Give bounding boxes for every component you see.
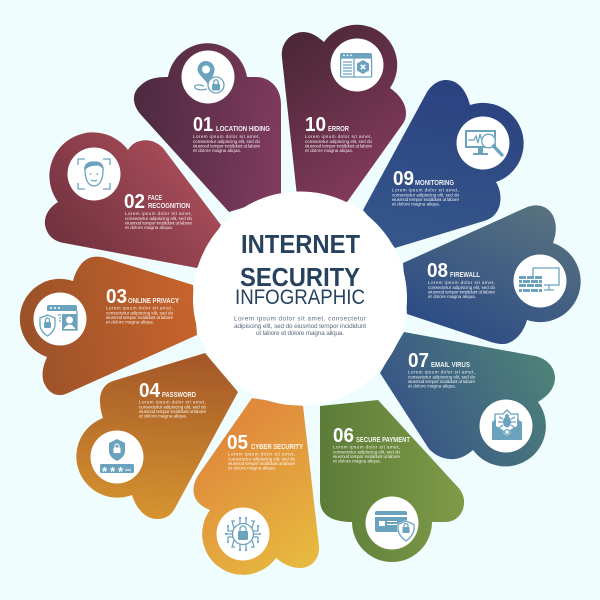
body text 10: Lorem ipsum dolor sit amet, — [305, 134, 372, 139]
petal shape 03 — [20, 257, 197, 395]
body text 04: Lorem ipsum dolor sit amet, — [139, 400, 206, 404]
title — [235, 231, 365, 309]
center description: Lorem ipsum dolor sit amet, consectetur — [234, 316, 367, 322]
title: INFOGRAPHIC — [235, 286, 365, 309]
number and label 10: ERROR — [328, 126, 349, 133]
icon: browser window with error — [330, 38, 384, 92]
panel: 04 password — [76, 353, 238, 519]
number and label 07 — [408, 350, 470, 372]
body text 01 — [193, 134, 260, 153]
panel: 03 online privacy — [20, 257, 197, 395]
number and label 06: 06 — [333, 425, 354, 447]
icon: envelope with bug — [480, 400, 532, 452]
number and label 05: 05 — [227, 432, 248, 454]
number and label 09: MONITORING — [415, 180, 454, 187]
body text 06: et dolore magna aliqua. — [333, 459, 381, 464]
body text 02: consectetur adipiscing elit, sed do — [125, 216, 192, 221]
body text 03: eiusmod tempor incididunt ut labore — [106, 315, 173, 320]
panel: 06 secure payment — [320, 400, 464, 562]
body text 02 — [125, 211, 192, 230]
body text 01: et dolore magna aliqua. — [193, 148, 241, 153]
body text 08: Lorem ipsum dolor sit amet, — [428, 280, 495, 285]
body text 04: et dolore magna aliqua. — [139, 414, 187, 419]
icon: browser with shield and user — [34, 292, 86, 346]
title: INTERNET — [241, 231, 360, 259]
petal shape 05 — [193, 398, 319, 575]
number and label 05: CYBER SECURITY — [251, 444, 303, 451]
number and label 10: 10 — [305, 114, 326, 136]
icon: credit card with shield — [366, 496, 418, 550]
panel: 10 error — [282, 25, 406, 202]
panel: 07 email virus — [380, 332, 555, 466]
petal shape 02 — [45, 132, 221, 268]
body text 10 — [305, 134, 372, 153]
body text 10: et dolore magna aliqua. — [305, 148, 353, 153]
number and label 04: 04 — [139, 380, 161, 402]
number and label 03 — [106, 286, 179, 308]
petal shape 07 — [380, 332, 555, 466]
petal shape 01 — [134, 43, 281, 212]
body text 02: eiusmod tempor incididunt ut labore — [125, 220, 192, 226]
body text 06: eiusmod tempor incididunt ut labore — [333, 454, 400, 459]
panel: 05 cyber security — [193, 398, 319, 575]
body text 03 — [106, 306, 173, 325]
center description: ut labore et dolore magna aliqua. — [256, 330, 344, 337]
panel: 08 firewall — [403, 205, 581, 344]
icon: location pin with lock — [182, 50, 234, 104]
center description: adipiscing elit, sed do eiusmod tempor incididunt — [234, 323, 366, 330]
body text 07 — [408, 370, 475, 389]
number and label 05 — [227, 432, 303, 454]
body text 07: eiusmod tempor incididunt ut labore — [408, 379, 475, 384]
body text 02: Lorem ipsum dolor sit amet, — [125, 211, 192, 216]
number and label 07: EMAIL VIRUS — [431, 362, 470, 369]
body text 06: consectetur adipiscing elit, sed do — [333, 449, 400, 454]
body text 09: et dolore magna aliqua. — [392, 202, 440, 207]
body text 04: consectetur adipiscing elit, sed do — [139, 404, 206, 409]
body text 09 — [392, 188, 459, 207]
title: SECURITY — [240, 264, 360, 292]
number and label 08: FIREWALL — [450, 272, 481, 279]
number and label 04 — [139, 380, 196, 402]
number and label 07: 07 — [408, 350, 429, 372]
number and label 03: ONLINE PRIVACY — [128, 298, 179, 305]
body text 05: et dolore magna aliqua. — [228, 466, 276, 471]
number and label 02: 02 — [124, 191, 145, 213]
body text 07: et dolore magna aliqua. — [408, 384, 456, 389]
petal shape 06 — [320, 400, 464, 562]
body text 03: et dolore magna aliqua. — [106, 320, 154, 325]
body text 09: consectetur adipiscing elit, sed do — [392, 192, 459, 197]
body text 03: Lorem ipsum dolor sit amet, — [106, 306, 173, 310]
center circle — [193, 192, 407, 406]
body text 05 — [228, 452, 295, 471]
number and label 08 — [427, 260, 481, 282]
number and label 06 — [333, 425, 411, 447]
body text 08: eiusmod tempor incididunt ut labore — [428, 290, 495, 294]
body text 07: Lorem ipsum dolor sit amet, — [408, 370, 475, 374]
icon: shield and password field — [90, 430, 144, 484]
number and label 03: 03 — [106, 286, 127, 308]
body text 06 — [333, 444, 400, 464]
number and label 09 — [393, 168, 454, 190]
body text 01: eiusmod tempor incididunt ut labore — [193, 144, 260, 148]
petal shape 04 — [76, 353, 238, 519]
body text 09: eiusmod tempor incididunt ut labore — [392, 197, 459, 202]
body text 05: Lorem ipsum dolor sit amet, — [228, 452, 295, 456]
body text 05: consectetur adipiscing elit, sed do — [228, 456, 295, 461]
panel: 02 face recognition — [45, 132, 221, 268]
number and label 01 — [193, 114, 270, 136]
body text 08: consectetur adipiscing elit, sed do — [428, 285, 495, 290]
petal shape 08 — [403, 205, 581, 344]
icon: monitor with magnifier — [456, 116, 510, 170]
number and label 09: 09 — [393, 168, 414, 190]
petal shape 10 — [282, 25, 406, 202]
body text 01: consectetur adipiscing elit, sed do — [193, 139, 260, 144]
body text 08: et dolore magna aliqua. — [428, 294, 476, 299]
body text 10: eiusmod tempor incididunt ut labore — [305, 144, 372, 148]
body text 01: Lorem ipsum dolor sit amet, — [193, 134, 260, 139]
number and label 01: 01 — [193, 114, 213, 136]
body text 06: Lorem ipsum dolor sit amet, — [333, 444, 400, 450]
center description — [234, 316, 367, 337]
number and label 04: PASSWORD — [162, 392, 196, 399]
number and label 02: FACE — [148, 195, 162, 202]
number and label 10 — [305, 114, 349, 136]
body text 03: consectetur adipiscing elit, sed do — [106, 310, 173, 315]
body text 10: consectetur adipiscing elit, sed do — [305, 139, 372, 144]
number and label 06: SECURE PAYMENT — [356, 437, 411, 444]
body text 02: et dolore magna aliqua. — [125, 225, 173, 230]
petal shape 09 — [363, 80, 524, 248]
number and label 01: LOCATION HIDING — [216, 126, 270, 133]
panel: 09 monitoring — [363, 80, 524, 248]
number and label 08: 08 — [427, 260, 448, 282]
body text 04 — [139, 400, 206, 419]
panel: 01 location hiding — [134, 43, 281, 212]
body text 04: eiusmod tempor incididunt ut labore — [139, 409, 206, 414]
body text 09: Lorem ipsum dolor sit amet, — [392, 188, 459, 192]
number and label 02 — [124, 191, 190, 213]
icon: shield and password field: *** — [102, 464, 124, 479]
body text 08 — [428, 280, 495, 299]
icon: face scan — [68, 148, 120, 200]
number and label 02: RECOGNITION — [148, 203, 190, 210]
icon: brick wall and monitor — [514, 254, 566, 308]
icon: circuit lock — [216, 508, 270, 560]
body text 05: eiusmod tempor incididunt ut labore — [228, 461, 295, 466]
body text 07: consectetur adipiscing elit, sed do — [408, 374, 475, 379]
